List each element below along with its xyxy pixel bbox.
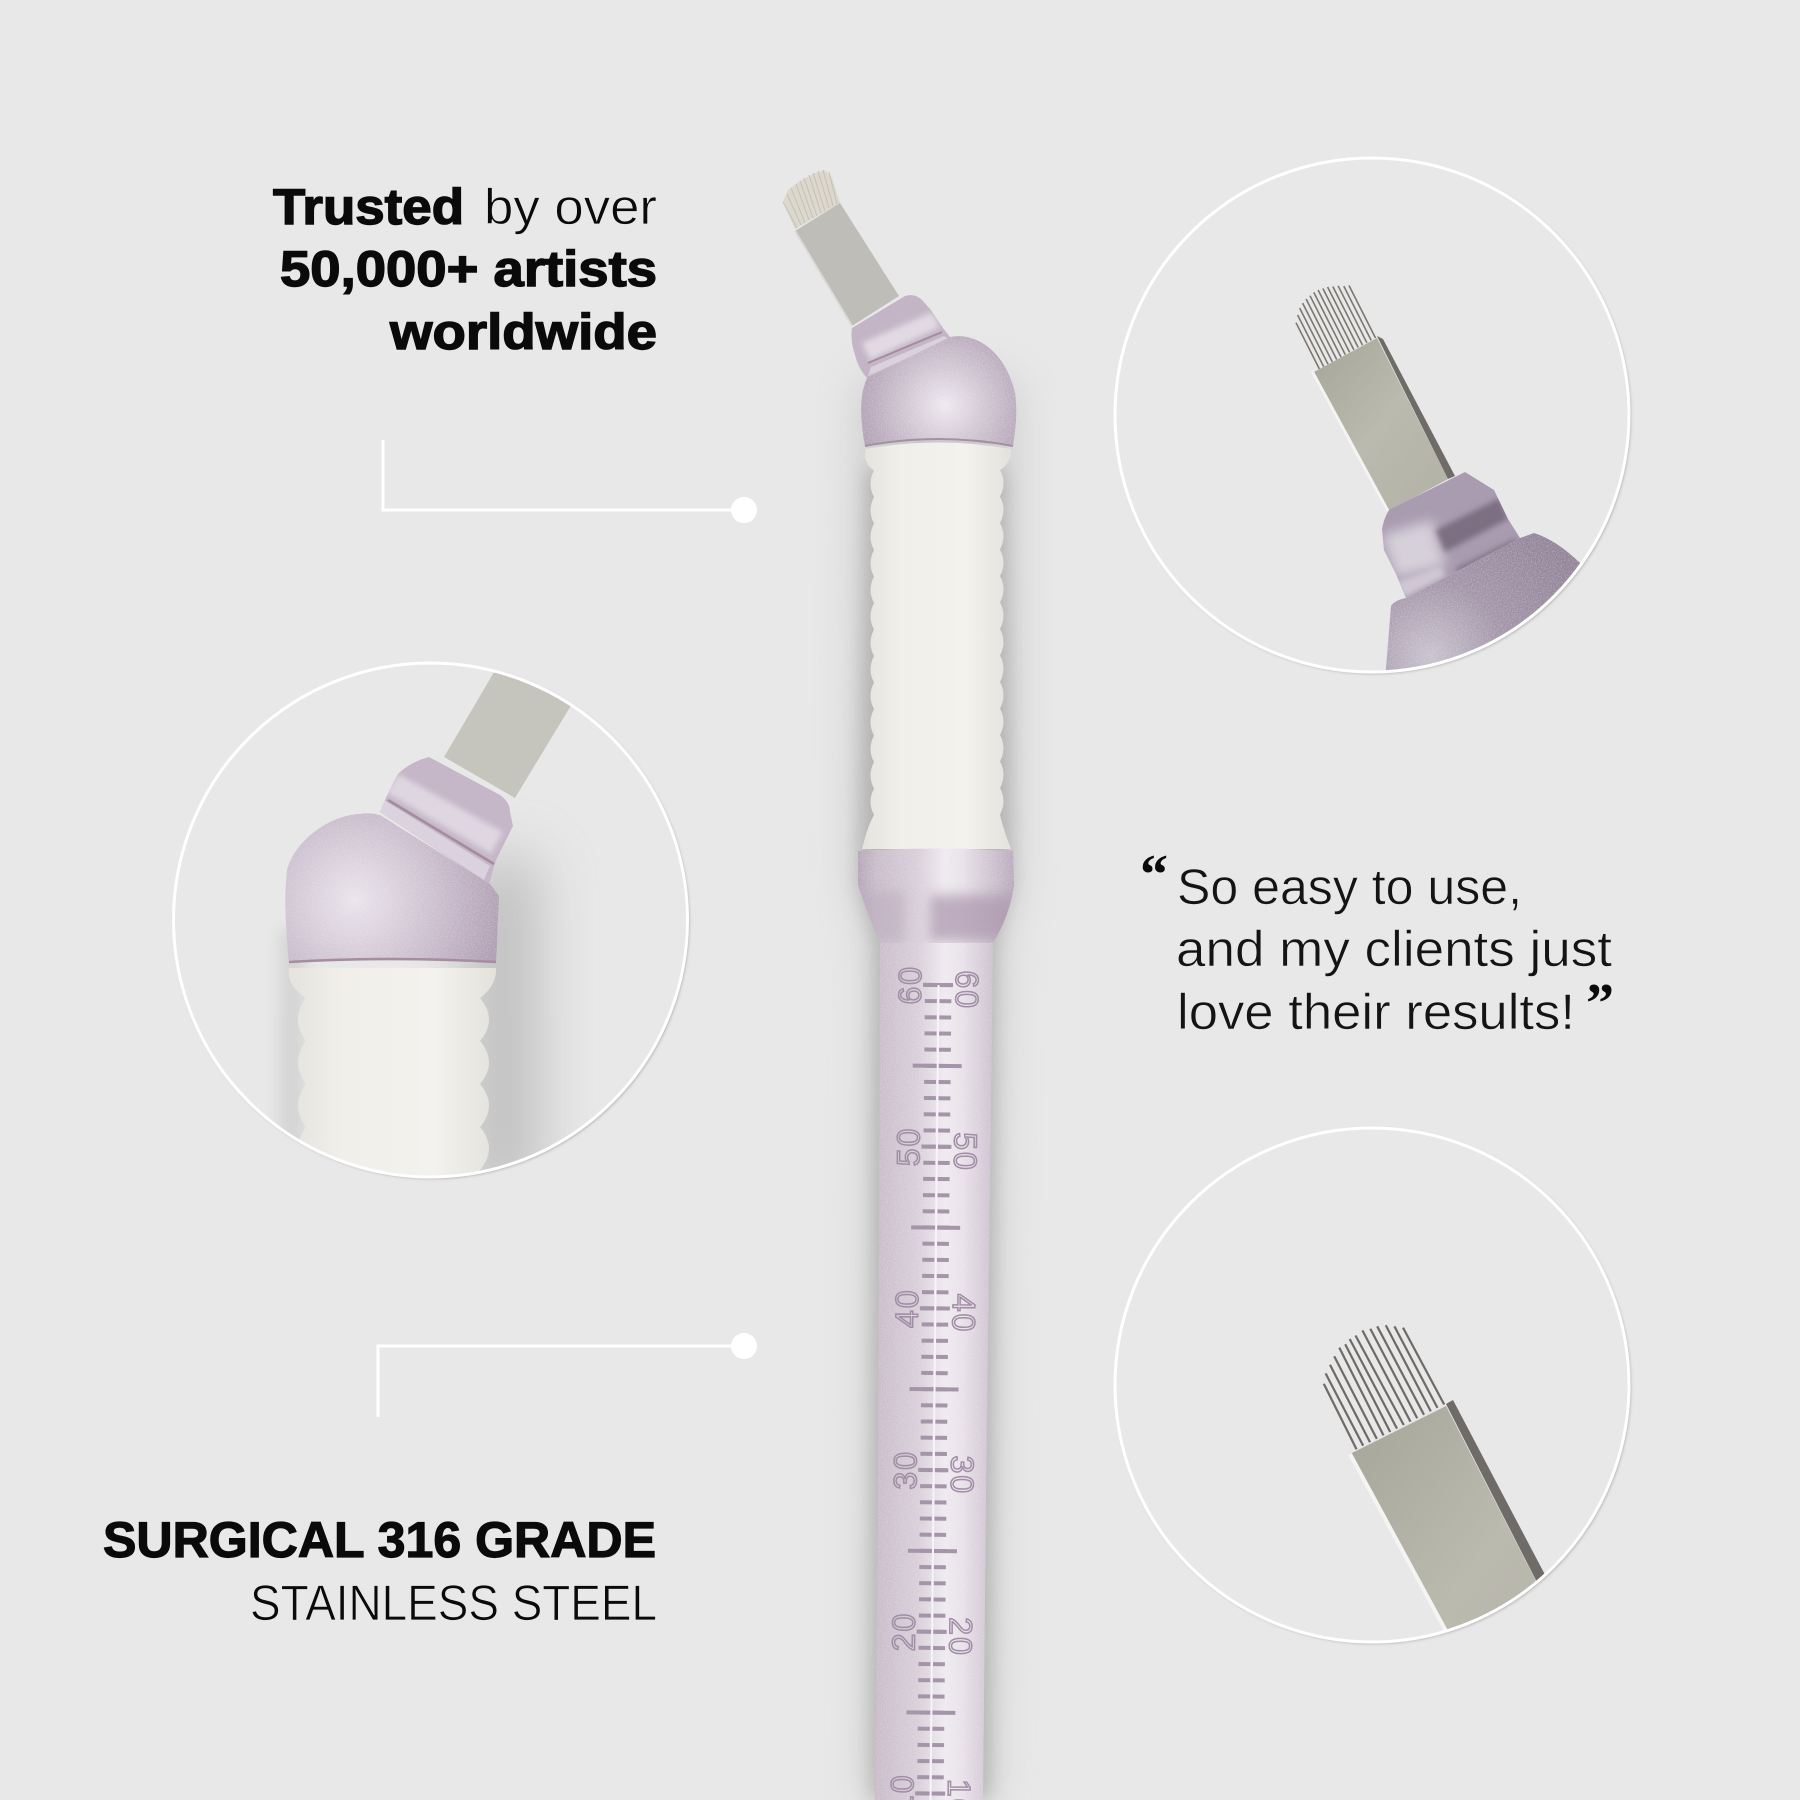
pen body and shaft bbox=[852, 848, 1015, 1800]
pen white ribbed grip bbox=[862, 442, 1011, 849]
dome left circle bbox=[285, 813, 499, 963]
needles bottom right bbox=[1324, 1325, 1444, 1449]
testimonial quote: and my clients just bbox=[1176, 921, 1612, 977]
ruler numbers: 20 bbox=[942, 1617, 979, 1657]
circle detail: top right blade and collar bbox=[1115, 158, 1629, 680]
heading: trusted by over 50,000+ artists worldwide: Trusted bbox=[273, 179, 464, 235]
ruler numbers: 30 bbox=[887, 1450, 923, 1490]
pen dome bbox=[861, 336, 1016, 446]
closing quote mark: ” bbox=[1586, 973, 1614, 1035]
heading: surgical 316 grade stainless steel: SURGICAL 316 GRADE bbox=[103, 1512, 656, 1568]
pen shadow bbox=[856, 380, 1015, 1800]
collar left circle bbox=[380, 757, 513, 884]
dome top right bbox=[1386, 533, 1580, 670]
blade bottom right bbox=[1348, 1400, 1544, 1630]
ruler numbers bbox=[884, 965, 985, 1800]
needles top right bbox=[1296, 286, 1376, 369]
heading: trusted by over 50,000+ artists worldwide bbox=[273, 179, 657, 360]
heading: trusted by over 50,000+ artists worldwide: worldwide bbox=[389, 304, 657, 360]
circle detail: left dome and grip bbox=[174, 640, 688, 1213]
heading: surgical 316 grade stainless steel bbox=[103, 1512, 657, 1631]
ruler numbers: 30 bbox=[944, 1455, 980, 1495]
ruler numbers: 60 bbox=[949, 970, 985, 1010]
connector line: trusted callout to grip bbox=[383, 440, 757, 523]
pen blade bbox=[795, 203, 899, 326]
blade left circle bbox=[444, 672, 570, 798]
circle detail: bottom right needles bbox=[1114, 1126, 1632, 1646]
testimonial quote bbox=[1140, 844, 1614, 1040]
ruler markings bbox=[884, 965, 985, 1800]
pen shadow inside circle bbox=[280, 860, 535, 1200]
pen needles bbox=[783, 170, 840, 229]
ruler numbers: 50 bbox=[947, 1132, 984, 1172]
opening quote mark: “ bbox=[1140, 844, 1168, 906]
heading: trusted by over 50,000+ artists worldwide: by over bbox=[484, 179, 657, 235]
ruler numbers: 60 bbox=[892, 965, 928, 1005]
grip left circle bbox=[288, 968, 496, 1176]
main pen illustration bbox=[783, 170, 1016, 1800]
pen collar bbox=[851, 295, 950, 378]
ruler numbers: 40 bbox=[889, 1288, 925, 1328]
heading: surgical 316 grade stainless steel: STAINLESS STEEL bbox=[250, 1575, 657, 1631]
ruler numbers: 50 bbox=[890, 1126, 927, 1166]
heading: trusted by over 50,000+ artists worldwide: 50,000+ artists bbox=[280, 241, 657, 297]
testimonial quote: So easy to use, bbox=[1177, 859, 1522, 915]
ruler numbers: 20 bbox=[885, 1612, 922, 1651]
collar top right bbox=[1382, 472, 1520, 598]
ruler numbers: 40 bbox=[946, 1294, 982, 1334]
blade top right bbox=[1312, 336, 1455, 511]
connector line: steel callout to shaft bbox=[378, 1333, 757, 1417]
testimonial quote: love their results! bbox=[1177, 984, 1575, 1040]
